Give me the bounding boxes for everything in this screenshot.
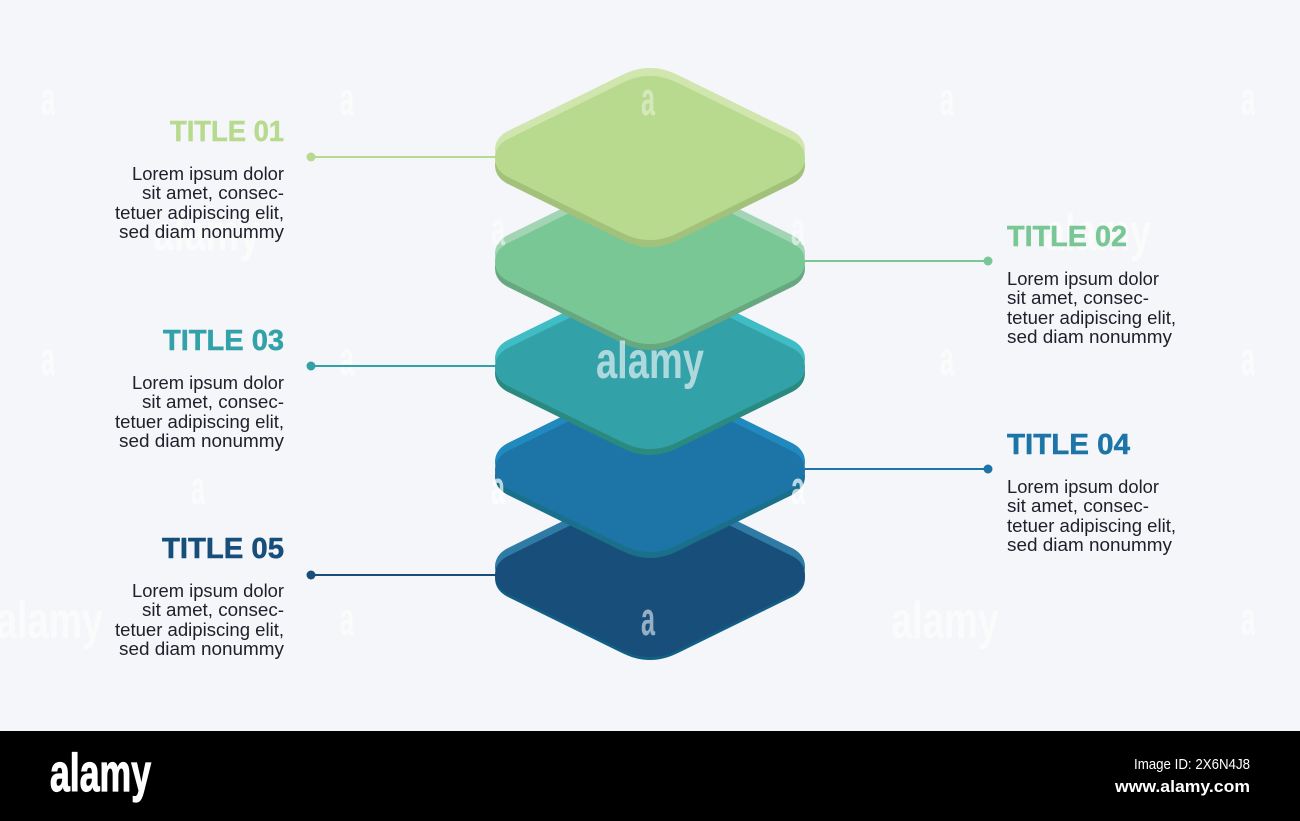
layer 3 bbox=[495, 277, 805, 455]
watermark: over stack: a bbox=[641, 72, 655, 125]
watermark: over stack: a bbox=[491, 202, 505, 255]
connector: title 04 bbox=[803, 464, 992, 474]
layer 2 bbox=[495, 172, 805, 350]
text block: title 01 bbox=[115, 116, 284, 242]
watermark: background pattern: a bbox=[41, 332, 55, 385]
text block: title 02: Lorem ipsum dolor bbox=[1007, 269, 1159, 289]
footer bar: www.alamy.com bbox=[1114, 777, 1250, 796]
text block: title 05: sed diam nonummy bbox=[119, 639, 284, 659]
text block: title 04: TITLE 04 bbox=[1007, 429, 1130, 461]
watermark: background pattern: alamy bbox=[1044, 204, 1151, 262]
watermark: background pattern: a bbox=[940, 332, 954, 385]
footer bar: alamy bbox=[50, 744, 151, 803]
connector: title 05 bbox=[306, 570, 497, 580]
layer 4 bbox=[495, 380, 805, 558]
text block: title 03: tetuer adipiscing elit, bbox=[115, 412, 284, 432]
text block: title 01: Lorem ipsum dolor bbox=[132, 164, 284, 184]
layer 5 bbox=[495, 485, 805, 660]
watermark: background pattern: a bbox=[340, 332, 354, 385]
watermark: background pattern: alamy bbox=[891, 592, 999, 650]
watermark: background pattern: alamy bbox=[153, 204, 260, 262]
text block: title 04: Lorem ipsum dolor bbox=[1007, 477, 1159, 497]
connector: title 03 bbox=[306, 362, 497, 370]
text block: title 05: sit amet, consec- bbox=[142, 600, 284, 620]
text block: title 01: sit amet, consec- bbox=[142, 183, 284, 203]
text block: title 04: sit amet, consec- bbox=[1007, 496, 1149, 516]
text block: title 05 bbox=[115, 533, 284, 659]
text block: title 02 bbox=[1007, 221, 1176, 347]
footer bar: Image ID: 2X6N4J8 bbox=[1134, 756, 1250, 773]
text block: title 02: tetuer adipiscing elit, bbox=[1007, 308, 1176, 328]
watermark: background pattern: a bbox=[191, 461, 205, 514]
text block: title 05: Lorem ipsum dolor bbox=[132, 581, 284, 601]
connector: title 01 bbox=[306, 152, 497, 162]
text block: title 02: sed diam nonummy bbox=[1007, 327, 1172, 347]
watermark: background pattern: a bbox=[41, 72, 55, 125]
watermark: over stack: a bbox=[791, 461, 805, 514]
watermark: background pattern: a bbox=[340, 72, 354, 125]
text block: title 03 bbox=[115, 325, 284, 451]
text block: title 03: sed diam nonummy bbox=[119, 431, 284, 451]
text block: title 03: Lorem ipsum dolor bbox=[132, 373, 284, 393]
watermark: background pattern: a bbox=[1241, 72, 1255, 125]
footer bar bbox=[0, 731, 1300, 821]
layer 1 bbox=[495, 68, 805, 247]
watermark: background pattern: a bbox=[1241, 592, 1255, 645]
watermark: over stack: a bbox=[641, 592, 655, 645]
watermark: over stack: a bbox=[791, 202, 805, 255]
watermark: background pattern bbox=[0, 72, 1255, 650]
text block: title 03: TITLE 03 bbox=[163, 325, 284, 357]
watermark: background pattern: a bbox=[1241, 332, 1255, 385]
text block: title 02: sit amet, consec- bbox=[1007, 288, 1149, 308]
watermark: background pattern: alamy bbox=[0, 592, 103, 650]
watermark: over stack: alamy bbox=[596, 332, 704, 390]
text block: title 04: sed diam nonummy bbox=[1007, 535, 1172, 555]
watermark: over stack: a bbox=[491, 461, 505, 514]
watermark: background pattern: a bbox=[340, 592, 354, 645]
watermark: background pattern: a bbox=[940, 72, 954, 125]
text block: title 04: tetuer adipiscing elit, bbox=[1007, 516, 1176, 536]
watermark: over stack bbox=[491, 72, 805, 645]
text block: title 01: TITLE 01 bbox=[170, 116, 284, 148]
text block: title 05: TITLE 05 bbox=[162, 533, 284, 565]
text block: title 02: TITLE 02 bbox=[1007, 221, 1127, 253]
text block: title 03: sit amet, consec- bbox=[142, 392, 284, 412]
text block: title 01: sed diam nonummy bbox=[119, 222, 284, 242]
text block: title 01: tetuer adipiscing elit, bbox=[115, 203, 284, 223]
connector: title 02 bbox=[803, 256, 992, 266]
text block: title 04 bbox=[1007, 429, 1176, 555]
text block: title 05: tetuer adipiscing elit, bbox=[115, 620, 284, 640]
